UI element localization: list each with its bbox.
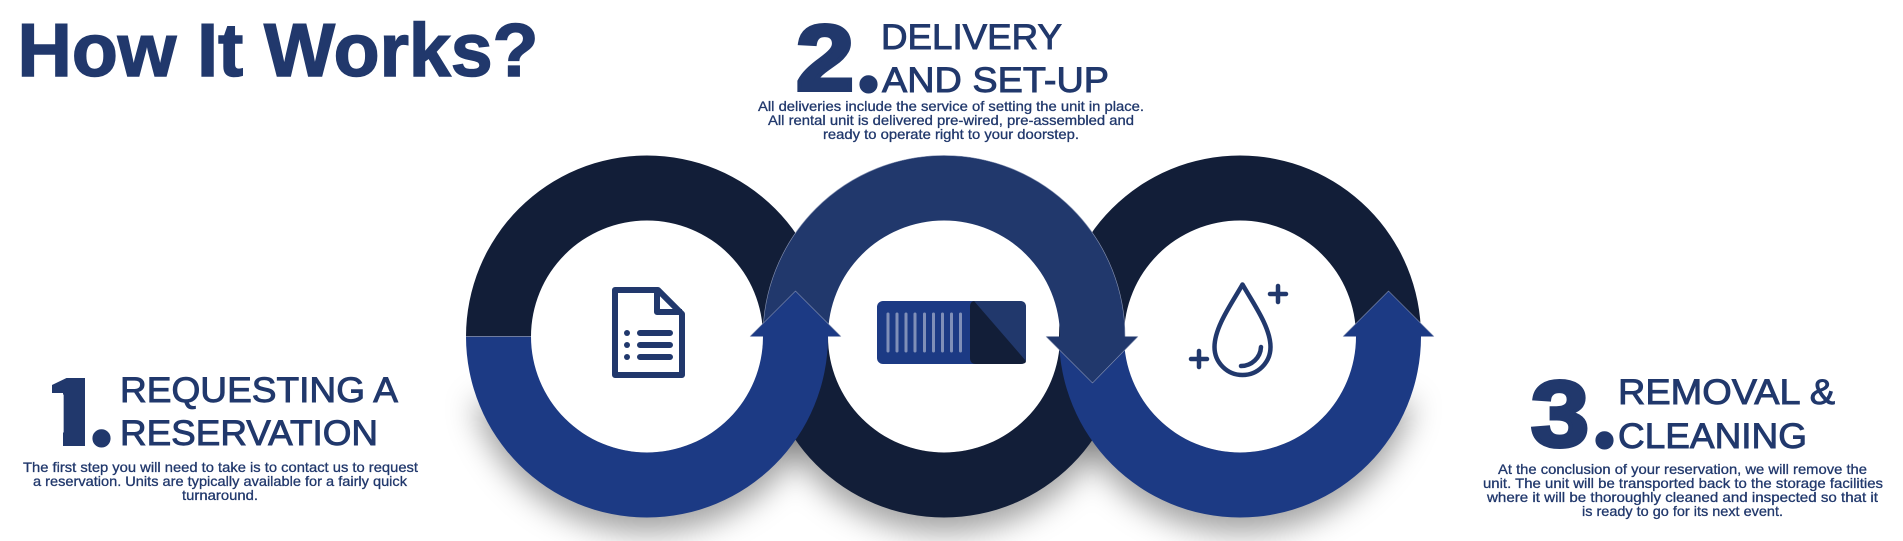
icon: water drop with plus signs: [1191, 284, 1286, 375]
step 2 heading: 2: [796, 6, 854, 110]
step 1 description: a reservation. Units are typically available for a fairly quick: [33, 473, 408, 489]
ring 1 upper half: [466, 156, 828, 336]
step 3 heading: REMOVAL &: [1618, 373, 1835, 412]
step 1 heading: [52, 376, 398, 448]
step 2 description: ready to operate right to your doorstep.: [823, 126, 1079, 142]
step 1 description: turnaround.: [182, 487, 258, 503]
step 3 heading: 3: [1531, 362, 1589, 466]
icon: document with list: [615, 290, 682, 375]
ring drop shadows: [473, 402, 1414, 533]
step 2 description: [758, 98, 1144, 142]
step 2 heading: [796, 0, 1109, 117]
page title: How It Works?: [18, 8, 538, 92]
step 3 description: is ready to go for its next event.: [1582, 503, 1783, 519]
step 3 heading: CLEANING: [1618, 417, 1807, 456]
ring 1 lower half with up arrow: [466, 291, 841, 518]
step 3 heading: [1531, 349, 1835, 473]
step 1 heading: .: [88, 347, 116, 471]
white ring centres: [531, 220, 1356, 452]
step 1 description: The first step you will need to take is to contact us to request: [23, 459, 418, 475]
step 3 description: At the conclusion of your reservation, we will remove the: [1498, 461, 1867, 477]
step 3 heading: .: [1590, 349, 1618, 473]
step 1 heading: 1: [37, 360, 107, 464]
ring 2 upper half with down arrow: [763, 156, 1138, 383]
step 3 description: [1483, 461, 1883, 519]
step 2 description: All deliveries include the service of setting the unit in place.: [758, 98, 1144, 114]
ring 2 lower half: [763, 336, 1125, 518]
ring 3 upper half: [1059, 156, 1421, 336]
icon: storage container: [877, 301, 1026, 364]
ring 3 lower half with up arrow: [1059, 291, 1434, 518]
step 1 heading: RESERVATION: [120, 414, 378, 453]
step 1 description: [23, 459, 418, 503]
step 2 heading: DELIVERY: [881, 18, 1062, 57]
step 2 heading: AND SET-UP: [882, 61, 1109, 100]
step 3 description: where it will be thoroughly cleaned and inspected so that it: [1486, 489, 1878, 505]
step 3 description: unit. The unit will be transported back to the storage facilities: [1483, 475, 1883, 491]
step 1 heading: REQUESTING A: [120, 371, 399, 410]
step 2 description: All rental unit is delivered pre-wired, pre-assembled and: [768, 112, 1134, 128]
